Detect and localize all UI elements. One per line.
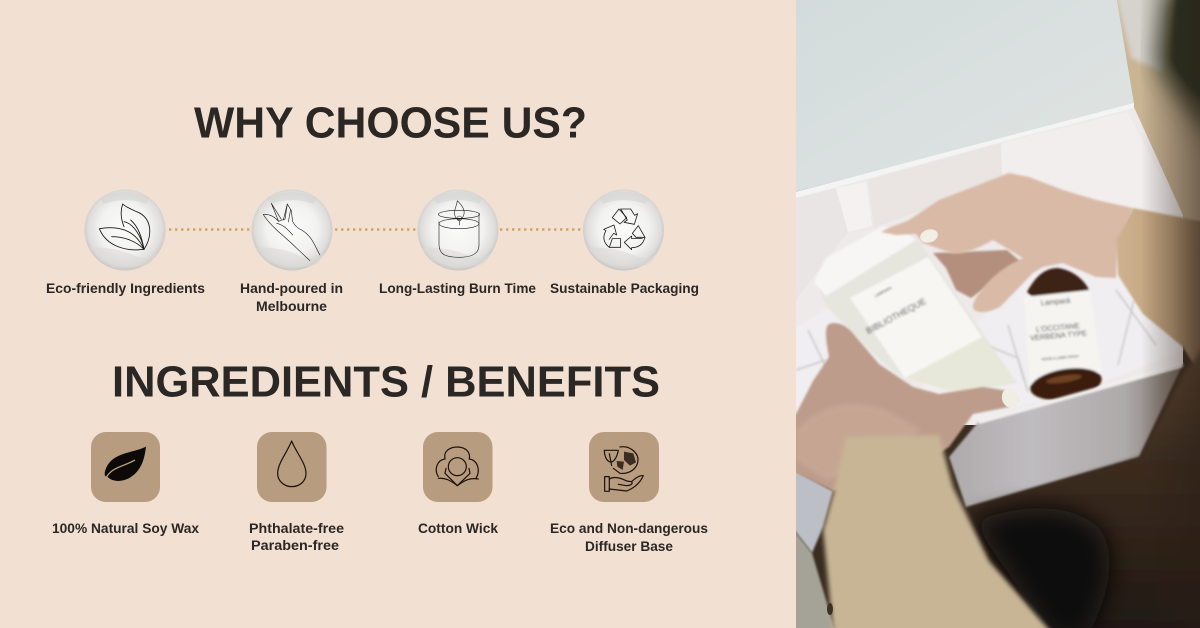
section: ingredients and benefits (52, 432, 708, 554)
icon: candle in orb (418, 190, 498, 270)
icon tile: earth in hand (589, 432, 659, 502)
title: why choose us: WHY CHOOSE US? (194, 98, 587, 148)
diffuser bottle (1024, 268, 1104, 404)
icon: leaves in orb (84, 190, 166, 270)
candle label text: BIBLIOTHEQUE (864, 296, 928, 336)
icon tile: water drop (257, 432, 326, 502)
floor and left box corner (796, 471, 834, 554)
dotted connector 1 (169, 228, 250, 231)
title: ingredients / benefits: INGREDIENTS / BENEFITS (112, 358, 660, 406)
open gift box interior (786, 105, 1183, 425)
section: why choose us features (46, 190, 699, 314)
beige sleeve forearm (823, 435, 1058, 628)
icon tile: solid leaf (91, 432, 160, 502)
label: long-lasting burn time: Long-Lasting Burn Time (379, 281, 536, 296)
label: phthalate-free paraben-free: Paraben-free (251, 538, 340, 553)
icon: recycle in orb (583, 190, 664, 270)
label: hand-poured in melbourne: Melbourne (256, 299, 327, 314)
lower hand with white thumbnail (786, 323, 1018, 491)
bottle label text: L'OCCITANE (1036, 321, 1080, 334)
candle jar (814, 226, 1017, 393)
label: 100% natural soy wax: 100% Natural Soy Wax (52, 521, 199, 536)
label: phthalate-free paraben-free: Phthalate-free (249, 521, 345, 536)
shadowed back finger (933, 250, 1021, 298)
nail: upper finger (920, 229, 938, 243)
photo background: chair and plant (1116, 0, 1200, 222)
tissue paper (796, 290, 1184, 392)
bottle label text: VERBENA TYPE (1030, 329, 1087, 342)
gift box lid (791, 0, 1134, 193)
label: eco and non-dangerous diffuser base (550, 521, 708, 554)
label: eco-friendly ingredients: Eco-friendly Ingredients (46, 281, 205, 296)
background panel (0, 0, 796, 628)
bottle label text (1027, 295, 1089, 362)
label: hand-poured in melbourne: Hand-poured in (240, 281, 343, 296)
dotted connector 3 (500, 228, 581, 231)
bottle label text: Lampará (1040, 296, 1071, 307)
dark background lower right (968, 330, 1200, 628)
icon: hand in orb (252, 190, 332, 270)
beige sleeve upper arm (1116, 207, 1200, 363)
label: hand-poured in melbourne (240, 281, 343, 314)
dotted connector 2 (335, 228, 416, 231)
label: phthalate-free paraben-free (249, 521, 345, 553)
upper hand with white nail (881, 173, 1133, 312)
label: eco and non-dangerous diffuser base: Eco and Non-dangerous (550, 521, 708, 536)
box front wall (949, 363, 1183, 507)
icon tile: cotton (423, 432, 492, 502)
nail: lower thumb (1002, 388, 1018, 408)
dark knee shadow (973, 508, 1109, 628)
photo panel: hands unpacking candle and diffuser from gift box (786, 0, 1200, 628)
bottle label text: ROOM & LINEN SPRAY (1041, 354, 1080, 362)
label: eco and non-dangerous diffuser base: Diffuser Base (585, 539, 673, 554)
candle label text: LAMPARA (874, 285, 893, 298)
sleeve button (827, 603, 833, 615)
label: cotton wick: Cotton Wick (418, 521, 498, 536)
label: sustainable packaging: Sustainable Packaging (550, 281, 699, 296)
right edge vignette (1145, 0, 1200, 477)
